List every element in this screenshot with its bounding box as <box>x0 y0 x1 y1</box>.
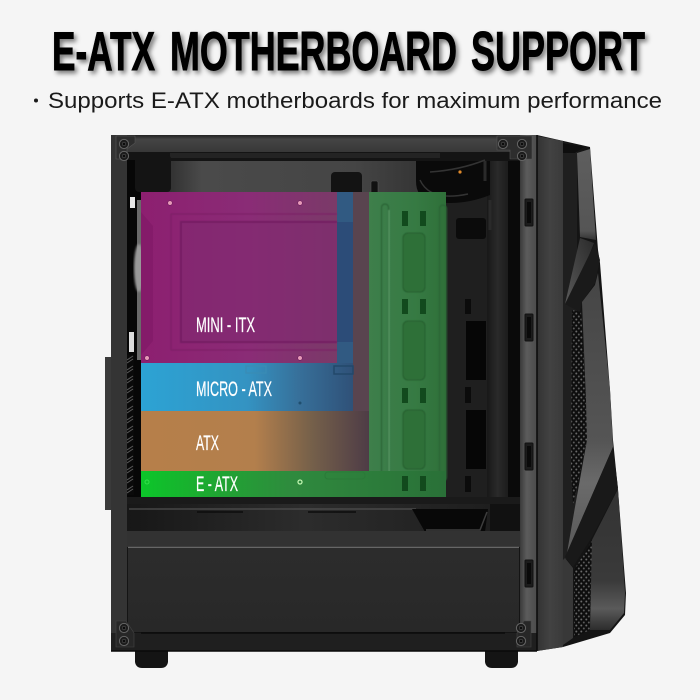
left side hinge strip <box>105 357 112 510</box>
motherboard tray top <box>141 161 446 192</box>
rear interior columns <box>446 161 520 503</box>
tray slots <box>402 211 426 403</box>
fan ghost <box>141 212 153 355</box>
E-ATX green area <box>369 192 446 481</box>
front inner strip <box>537 136 563 651</box>
Micro-ATX size band <box>141 192 353 411</box>
title: MOTHERBOARD <box>170 20 457 82</box>
case body <box>111 135 537 651</box>
tray bottom ledge <box>127 497 520 504</box>
upper triangle facet <box>565 238 594 304</box>
E-ATX size band <box>141 471 446 497</box>
screw holes <box>145 201 302 360</box>
side frame slots <box>525 199 533 587</box>
ATX size band <box>141 411 369 471</box>
small clip <box>371 181 378 194</box>
middle facet <box>567 273 613 553</box>
PSU cover <box>111 531 537 651</box>
drive cut-outs <box>403 233 425 469</box>
tray recess <box>171 214 337 350</box>
front panel silhouette <box>537 135 626 651</box>
top dark notch <box>563 143 584 153</box>
grommet <box>331 172 362 196</box>
lower facet <box>590 489 625 630</box>
top corner black block <box>135 155 171 192</box>
dark band <box>563 142 577 560</box>
subtitle bullet: Supports E-ATX motherboards for maximum performance <box>48 88 662 113</box>
upper mesh <box>571 310 587 505</box>
diagonal dark band <box>565 243 600 312</box>
vertical ribs <box>382 204 446 481</box>
lower mesh <box>574 541 592 637</box>
lower strip <box>563 558 573 645</box>
label: E-ATX: E - ATX <box>196 473 238 496</box>
corner screws <box>116 136 532 647</box>
Mini-ITX size band <box>141 192 337 363</box>
PC case illustration <box>105 135 626 668</box>
label: Mini-ITX: MINI - ITX <box>196 314 255 337</box>
label: ATX: ATX <box>196 432 219 455</box>
lower dark band <box>565 447 618 567</box>
front panel <box>537 135 626 651</box>
case frame <box>111 135 537 651</box>
left interior fan area <box>127 160 144 535</box>
upper stripe facet <box>577 149 596 240</box>
title: E-ATX <box>52 20 155 82</box>
case feet <box>135 650 518 668</box>
cable bundle <box>416 160 490 230</box>
label: Micro-ATX: MICRO - ATX <box>196 378 272 401</box>
shroud <box>127 504 520 532</box>
ATX extension strip <box>353 192 369 411</box>
